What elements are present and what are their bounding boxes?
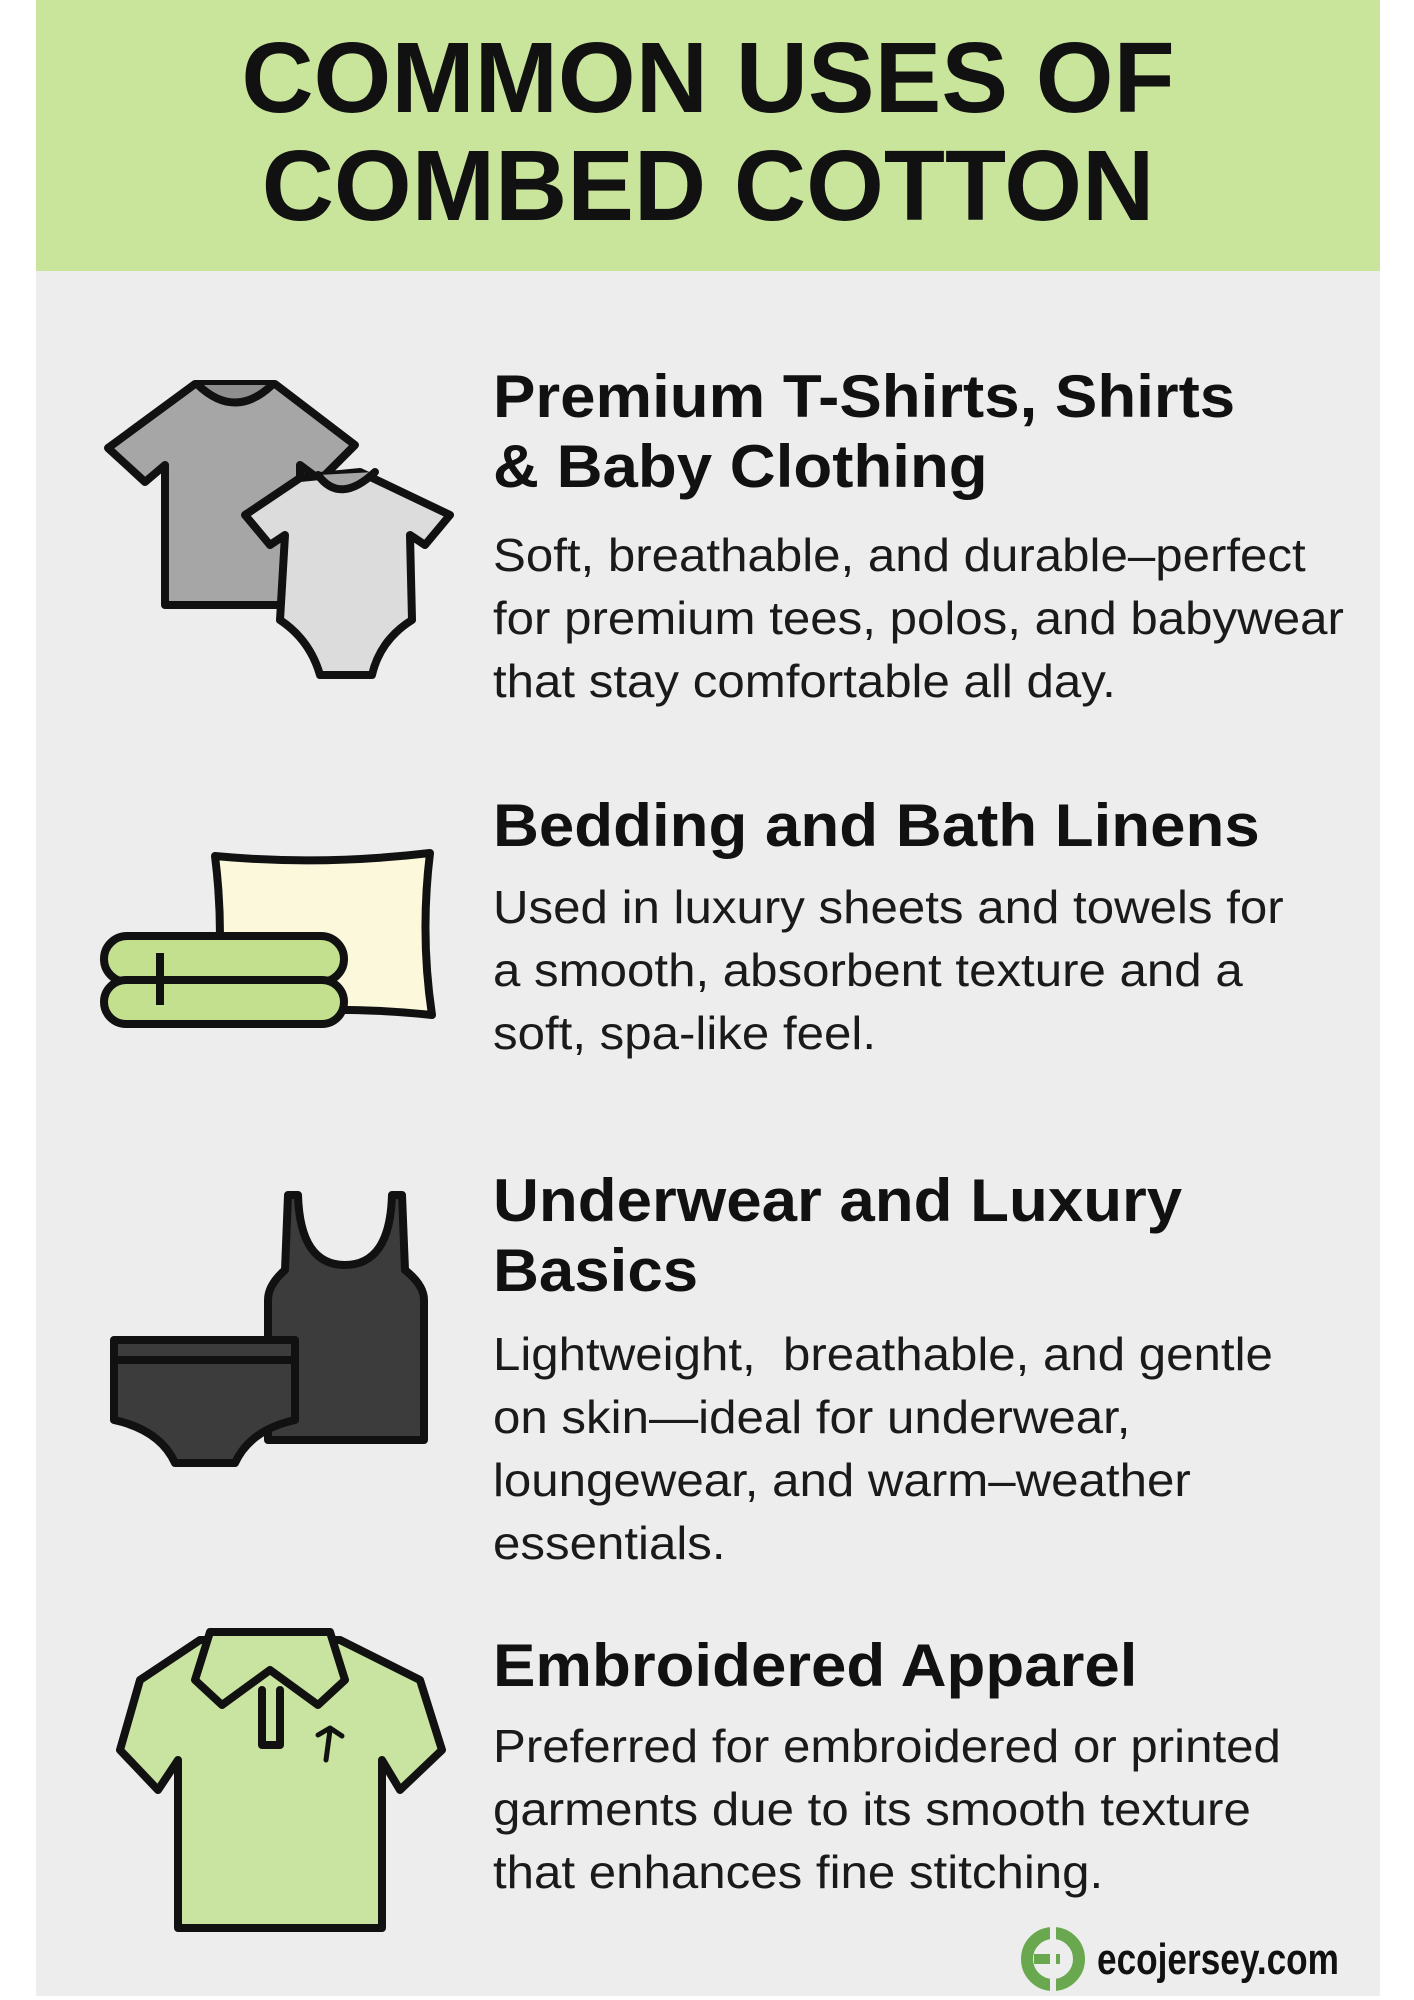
text: premium t-shirts: that stay comfortable all day. xyxy=(493,655,1116,707)
text: bedding xyxy=(493,881,1284,1059)
title: COMBED COTTON xyxy=(262,130,1154,242)
logo xyxy=(1021,1927,1339,1991)
heading: underwear: Underwear and Luxury xyxy=(493,1167,1182,1234)
text: bedding: Used in luxury sheets and towels for xyxy=(493,881,1284,933)
title: COMMON USES OF xyxy=(241,22,1175,134)
heading: premium t-shirts: & Baby Clothing xyxy=(493,433,988,500)
icon: t-shirt and bodysuit xyxy=(108,384,450,675)
text: embroidered: that enhances fine stitching. xyxy=(493,1846,1103,1898)
text: underwear: Lightweight, breathable, and gentle xyxy=(493,1328,1273,1380)
heading: premium t-shirts xyxy=(493,363,1235,500)
heading: bedding: Bedding and Bath Linens xyxy=(493,792,1260,859)
heading: premium t-shirts: Premium T-Shirts, Shirts xyxy=(493,363,1235,430)
icon: pillow and towel xyxy=(104,853,432,1024)
heading: embroidered: Embroidered Apparel xyxy=(493,1632,1137,1699)
text: underwear: loungewear, and warm–weather xyxy=(493,1454,1191,1506)
text: bedding: a smooth, absorbent texture and a xyxy=(493,944,1243,996)
text: premium t-shirts: for premium tees, polos, and babywear xyxy=(493,592,1344,644)
text: premium t-shirts: Soft, breathable, and durable–perfect xyxy=(493,529,1306,581)
text: premium t-shirts xyxy=(493,529,1344,707)
text: bedding: soft, spa-like feel. xyxy=(493,1007,876,1059)
header band xyxy=(36,0,1380,271)
heading: underwear: Basics xyxy=(493,1237,698,1304)
icon: tank top and briefs xyxy=(114,1195,424,1463)
text: underwear xyxy=(493,1328,1273,1569)
text: embroidered: garments due to its smooth texture xyxy=(493,1783,1251,1835)
text: underwear: on skin—ideal for underwear, xyxy=(493,1391,1130,1443)
logo: ecojersey.com xyxy=(1097,1935,1339,1984)
text: underwear: essentials. xyxy=(493,1517,726,1569)
title xyxy=(241,22,1175,242)
text: embroidered: Preferred for embroidered or printed xyxy=(493,1720,1281,1772)
icon: polo shirt xyxy=(120,1632,442,1928)
heading: underwear xyxy=(493,1167,1182,1304)
text: embroidered xyxy=(493,1720,1281,1898)
